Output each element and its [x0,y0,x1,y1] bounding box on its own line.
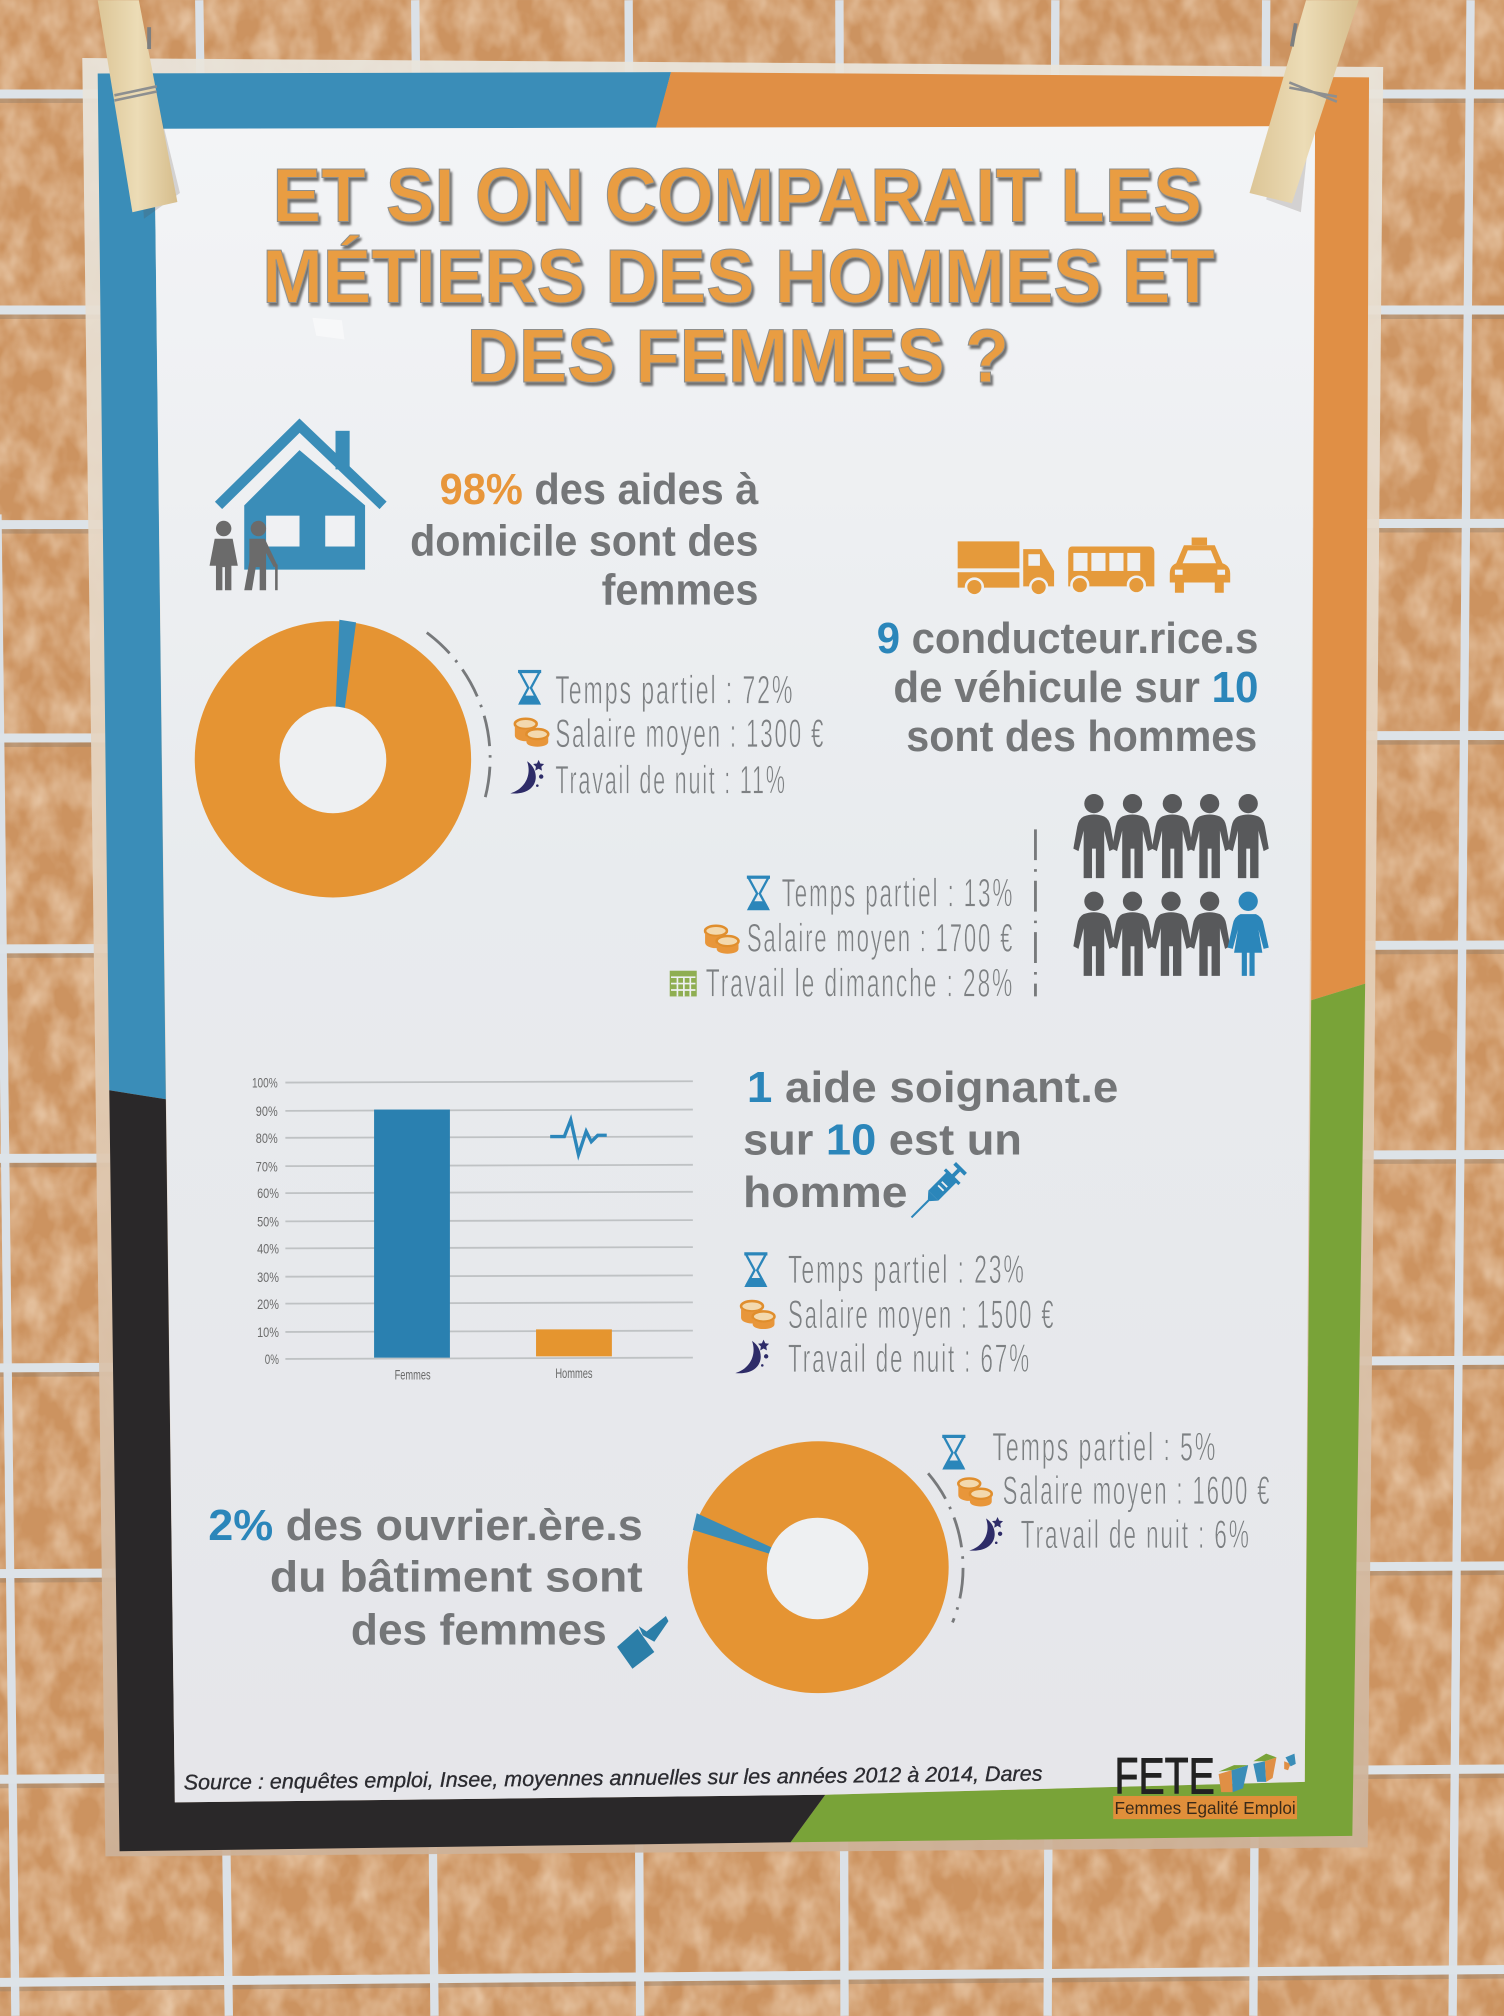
panel: blue corner [98,72,671,1099]
stats: conducteurs: Temps partiel : 13% [782,871,1014,915]
bar chart: aides soignants: Hommes [555,1365,593,1381]
icon: calendar [670,971,697,996]
axis labels: 30% [257,1269,279,1285]
clothespin: right [1249,0,1359,212]
heading: conducteurs: sont des hommes [906,712,1257,761]
bar: femmes [374,1110,450,1358]
stats: aides soignants: Travail de nuit : 67% [788,1337,1031,1381]
heading: aides à domicile: femmes [602,565,758,614]
axis labels: 90% [256,1103,278,1119]
stats: conducteurs [670,871,1014,1005]
panel: black corner [109,1090,825,1851]
donut chart: ouvrières du bâtiment [688,1441,963,1693]
heading: aides soignants [743,1063,1118,1217]
heading: ouvrières du bâtiment: des femmes [351,1605,607,1654]
icon: cubes [1219,1754,1296,1792]
heading: aides à domicile: domicile sont des [410,517,758,566]
axis labels [252,1075,279,1367]
axis labels: 20% [257,1296,279,1312]
heading: conducteurs [877,614,1258,761]
axis labels: 80% [256,1130,278,1146]
logo tagline [1113,1796,1297,1819]
heading: conducteurs: de véhicule sur 10 [893,663,1258,712]
clothespin: left [98,0,180,219]
heading: ouvrières du bâtiment: du bâtiment sont [270,1553,643,1602]
heading: ouvrières du bâtiment [208,1501,643,1654]
stats: aides à domicile [510,668,825,802]
heading: aides à domicile: 98% des aides à [440,465,759,514]
axis labels: 60% [257,1185,279,1201]
bar: hommes [536,1329,612,1356]
source line: Source : enquêtes emploi, Insee, moyennes annuelles sur les années 2012 à 2014, Dares [184,1763,1043,1795]
stats: ouvrières du bâtiment: Salaire moyen : 1600 € [1003,1469,1271,1513]
stats: aides soignants: Temps partiel : 23% [788,1248,1026,1292]
bar chart: aides soignants [252,1075,693,1383]
stats: aides soignants: Salaire moyen : 1500 € [788,1293,1055,1337]
icon: taxi [1170,538,1230,593]
title: DES FEMMES ? [467,314,1009,399]
heading: aides soignants: sur 10 est un [743,1116,1022,1165]
axis labels: 50% [257,1214,279,1230]
icon: syringe [904,1160,969,1225]
icon: house with elderly people [210,426,383,590]
plastic sleeve [82,58,1383,1856]
icon: ten people pictogram [1073,794,1269,976]
stats: conducteurs: Travail le dimanche : 28% [706,961,1014,1005]
panel: green corner [791,984,1365,1842]
heading: aides soignants: homme [743,1168,908,1217]
panel: orange corner [656,72,1369,1000]
icon: bus [1068,547,1154,593]
stats: conducteurs: Salaire moyen : 1700 € [747,916,1014,960]
heading: aides à domicile [410,465,759,614]
axis labels: 70% [256,1158,278,1174]
stats: ouvrières du bâtiment: Temps partiel : 5% [992,1425,1217,1469]
stats: aides soignants [735,1248,1055,1381]
reflection glare [312,318,345,340]
heading: ouvrières du bâtiment: 2% des ouvrier.ère.s [208,1501,643,1550]
heading: aides soignants: 1 aide soignant.e [747,1063,1118,1112]
icons: vehicles [958,538,1230,595]
bar chart: aides soignants: Femmes [395,1367,431,1383]
paper [154,126,1315,1802]
icon: paint brush [617,1616,668,1669]
heading: conducteurs: 9 conducteur.rice.s [877,614,1258,663]
stats: ouvrières du bâtiment [942,1425,1271,1557]
title: ET SI ON COMPARAIT LES [273,153,1202,238]
logo: FETE [1113,1746,1297,1819]
icon: truck [958,541,1054,595]
axis labels: 0% [265,1351,279,1367]
stats: ouvrières du bâtiment: Travail de nuit : 6% [1021,1513,1251,1557]
donut chart: aides à domicile [195,620,490,897]
poster [82,58,1383,1856]
axis labels: 40% [257,1241,279,1257]
stats: aides à domicile: Salaire moyen : 1300 € [555,712,825,756]
icon: heartbeat [550,1120,607,1155]
stats: aides à domicile: Travail de nuit : 11% [555,758,787,802]
title: MÉTIERS DES HOMMES ET [262,234,1215,319]
axis labels: 10% [257,1324,279,1340]
logo: FETE: FETE [1115,1746,1215,1804]
stats: aides à domicile: Temps partiel : 72% [555,668,794,712]
axis labels: 100% [252,1075,278,1091]
logo: FETE: Femmes Egalité Emploi [1115,1798,1296,1818]
title [262,153,1215,399]
